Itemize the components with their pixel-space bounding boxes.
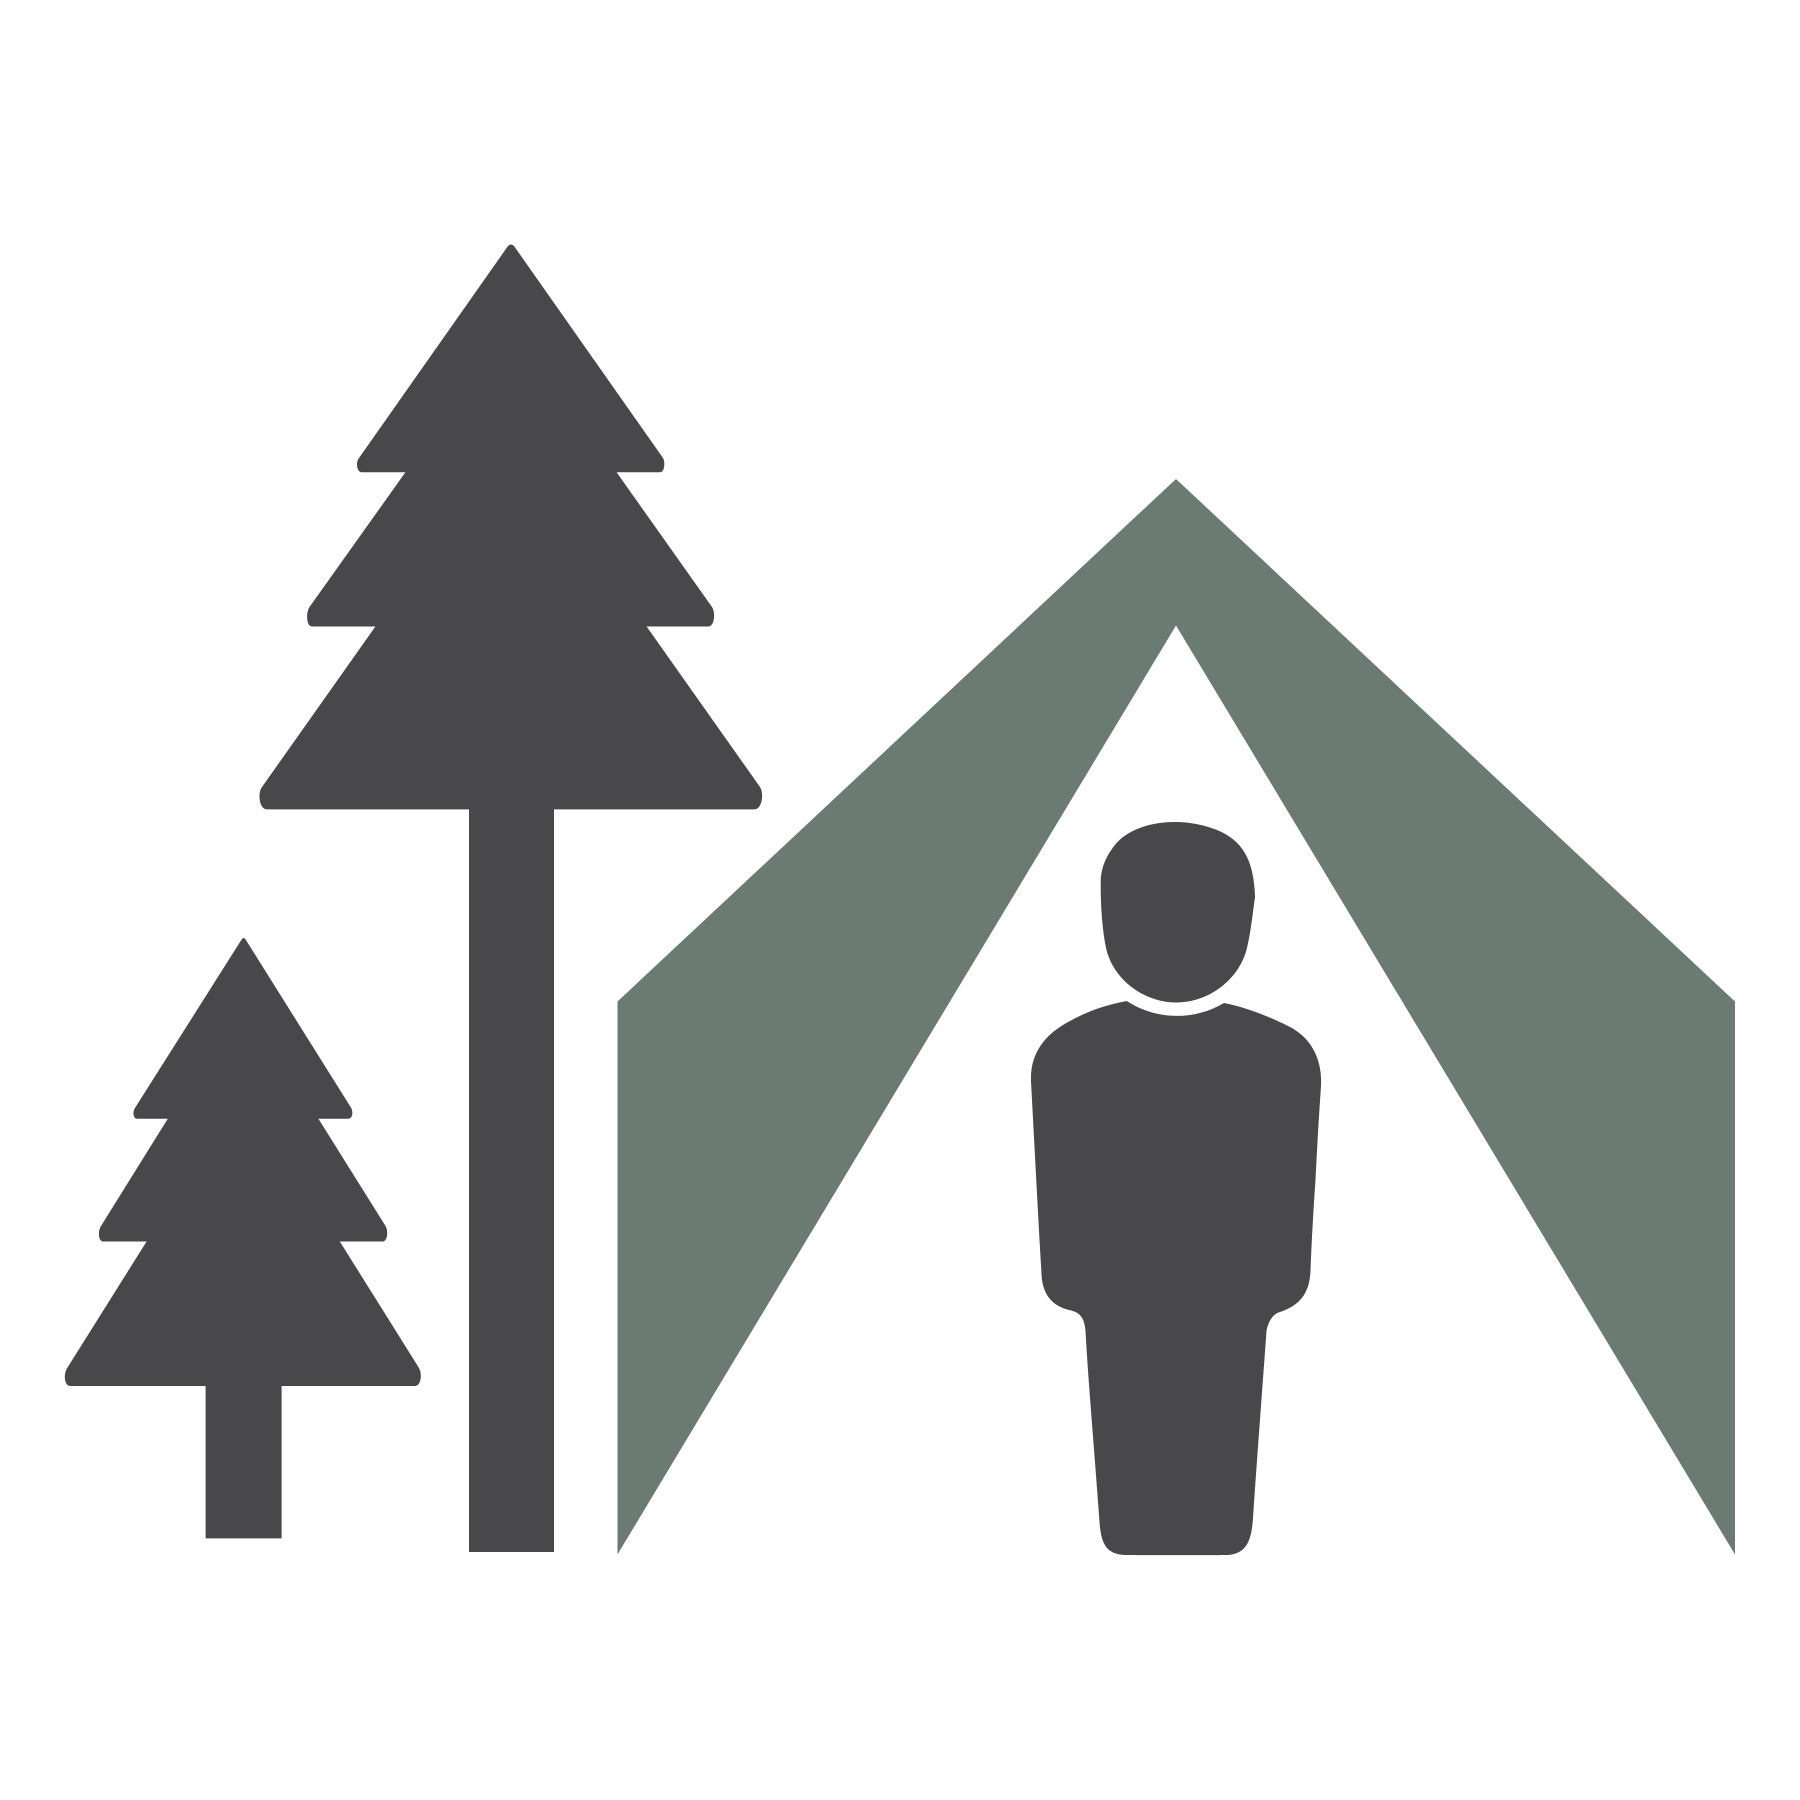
icon: small pine tree [65,938,421,1538]
person head [1101,822,1255,1003]
icon: tent [618,479,1735,1554]
icon: person [1031,822,1321,1555]
person body [1031,1001,1321,1555]
icon: tall pine tree [259,244,762,1552]
